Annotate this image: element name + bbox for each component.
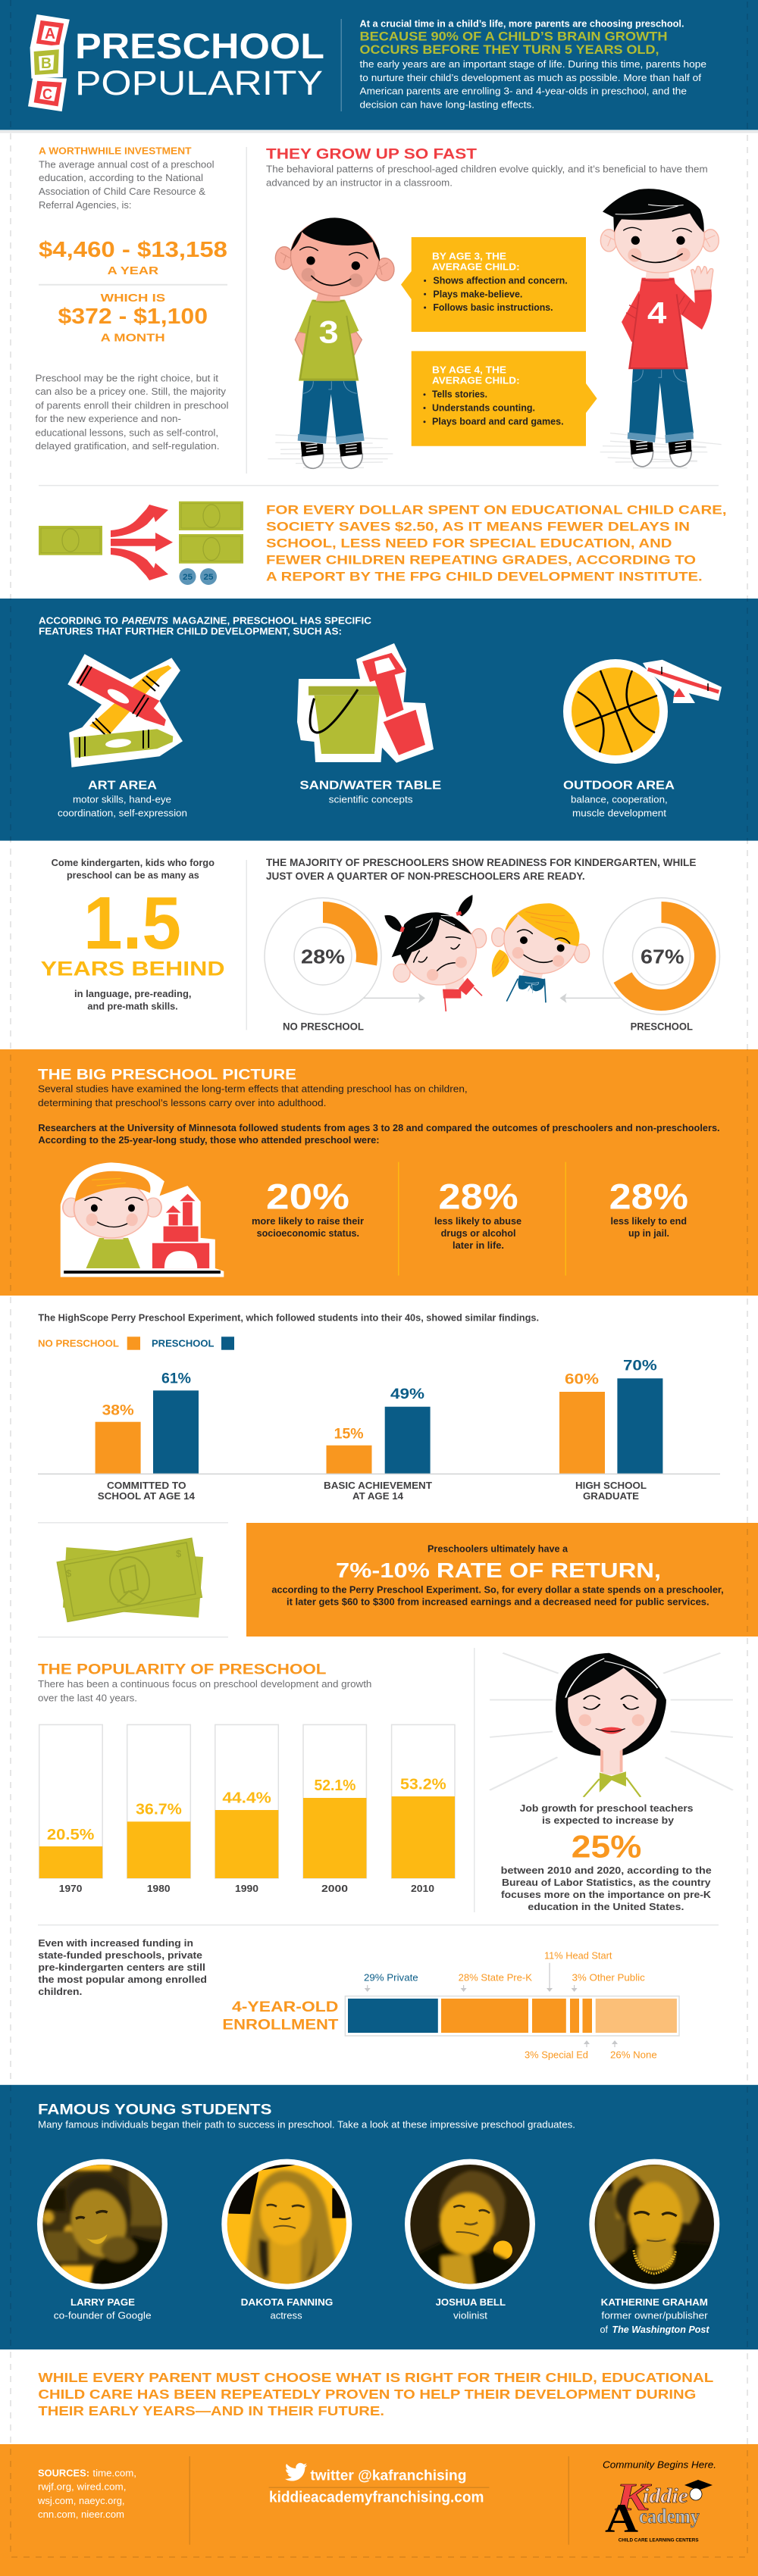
text block: intro: to nurture their child’s development as much as possible. More than half of [359, 72, 701, 83]
portrait: Dakota Fanning [221, 2159, 352, 2290]
text block: job growth stat: Job growth for preschool teachers [520, 1802, 693, 1814]
icon: ABC blocks [28, 14, 70, 111]
callout: by age 3: Shows affection and concern. [433, 274, 568, 286]
text block: features intro [39, 614, 372, 636]
text block: average cost: Referral Agencies, is: [39, 199, 132, 211]
contact links: twitter @kafranchising [310, 2468, 466, 2484]
heading: 4-year-old enrollment [222, 1999, 338, 2034]
donut chart: no preschool 28%: NO PRESCHOOL [283, 1021, 364, 1032]
legend: PRESCHOOL [152, 1338, 215, 1349]
text block: society saves: A REPORT BY THE FPG CHILD DEVELOPMENT INSTITUTE. [266, 569, 703, 583]
callout: by age 3: AVERAGE CHILD: [432, 261, 520, 273]
text block: closing statement [38, 2370, 714, 2418]
panel: return on childcare spending [39, 502, 726, 585]
title [75, 26, 324, 102]
text block: society saves [266, 503, 726, 583]
label: Larry Page [54, 2296, 152, 2321]
icon: money splitting into bills and coins: 25 [183, 573, 193, 582]
donut chart: preschool 67%: PRESCHOOL [631, 1021, 693, 1032]
label: Dakota Fanning: actress [270, 2310, 302, 2321]
bar chart: enrollment by year: 2010 [411, 1883, 434, 1894]
text block: average cost: The average annual cost of a preschool [39, 158, 215, 170]
bar chart: outcomes: COMMITTED TO [107, 1480, 186, 1491]
text block: society saves: SCHOOL, LESS NEED FOR SPECIAL EDUCATION, AND [266, 536, 672, 550]
illustration: happy girl [492, 903, 590, 1002]
panel: kindergarten readiness [265, 857, 720, 1032]
text block: funding: children. [38, 1986, 82, 1997]
label: Katherine Graham: former owner/publisher [601, 2310, 708, 2321]
text block: average cost [39, 158, 215, 211]
label: sand/water table: SAND/WATER TABLE [299, 780, 441, 792]
text block: pricey choice: can also be a pricey one. Still, the majority [35, 386, 227, 397]
callout: by age 3 [401, 237, 586, 332]
text block: closing statement: WHILE EVERY PARENT MUST CHOOSE WHAT IS RIGHT FOR THEIR CHILD, EDUCATIONAL [38, 2370, 714, 2385]
bar chart: outcomes: 60% [565, 1372, 599, 1388]
logo: Kiddie Academy: A [605, 2496, 638, 2541]
bar chart: enrollment by year: 1970 [59, 1883, 82, 1894]
label: art area [58, 780, 187, 818]
stat: 28% jail: less likely to end [611, 1215, 687, 1227]
portrait: Katherine Graham [589, 2159, 719, 2290]
logo: Kiddie Academy [603, 2459, 716, 2543]
text block: job growth stat: between 2010 and 2020, according to the [501, 1865, 712, 1876]
logo: Kiddie Academy: cademy [639, 2505, 700, 2528]
text block: experiment intro: The HighScope Perry Preschool Experiment, which followed students into their 40s, showed similar findings. [38, 1311, 539, 1323]
text block: intro [359, 18, 706, 111]
bar chart: outcomes: 70% [623, 1358, 657, 1374]
bar chart: enrollment by year: 52.1% [314, 1777, 356, 1794]
illustration: four-year-old boy: 4 [647, 297, 667, 330]
monthly cost figure: WHICH IS [101, 292, 165, 305]
text block: average cost: education, according to the National [39, 172, 203, 183]
monthly cost figure [58, 292, 208, 344]
logo: Kiddie Academy: K [615, 2476, 652, 2519]
text block: features intro: FEATURES THAT FURTHER CHILD DEVELOPMENT, SUCH AS: [39, 625, 342, 636]
panel: the big preschool picture [0, 1049, 758, 1296]
panel: they grow up so fast [266, 146, 722, 468]
text block: sources: wsj.com, naeyc.org, [37, 2495, 124, 2506]
panel: rate of return [38, 1522, 758, 1638]
bar chart: enrollment by year: 36.7% [136, 1802, 182, 1818]
text block: intro: decision can have long-lasting effects. [359, 99, 534, 111]
icon: banknotes: $ [66, 1568, 72, 1579]
monthly cost figure: A MONTH [101, 331, 165, 344]
text block: continuous focus: There has been a continuous focus on preschool development and growth [38, 1678, 371, 1690]
text block: features intro: MAGAZINE, PRESCHOOL HAS SPECIFIC [173, 614, 372, 626]
text block: funding: Even with increased funding in [38, 1937, 193, 1949]
portrait: Larry Page [37, 2159, 168, 2290]
heading: A WORTHWHILE INVESTMENT [39, 145, 192, 157]
portrait: Joshua Bell [405, 2159, 535, 2290]
text block: pricey choice: delayed gratification, and self-regulation. [35, 440, 220, 452]
icon: banknotes: $ [176, 1548, 182, 1559]
legend [38, 1336, 234, 1350]
label: outdoor area: OUTDOOR AREA [563, 780, 675, 792]
icon: banknotes [57, 1538, 203, 1622]
text block: long-term effects: According to the 25-year-long study, those who attended preschool were: [38, 1134, 380, 1146]
labels: enrollment categories with arrows: 11% Head Start [544, 1950, 612, 1962]
heading: THE POPULARITY OF PRESCHOOL [38, 1661, 327, 1677]
text block: sources: time.com, [92, 2468, 136, 2479]
panel: the popularity of preschool [38, 1661, 455, 1894]
text block: funding: the most popular among enrolled [38, 1974, 207, 1985]
big stat: 1.5 years behind: YEARS BEHIND [41, 958, 225, 980]
stat: 28% drugs: later in life. [453, 1240, 504, 1251]
illustration: sad girl and happy girl [384, 895, 590, 1011]
text block: intro: At a crucial time in a child’s life, more parents are choosing preschool. [359, 18, 684, 30]
label: Joshua Bell: JOSHUA BELL [436, 2296, 506, 2308]
text block: funding: pre-kindergarten centers are still [38, 1962, 205, 1973]
heading: THE MAJORITY OF PRESCHOOLERS SHOW READINESS FOR KINDERGARTEN, WHILE [266, 857, 696, 868]
bar chart: enrollment by year [39, 1724, 455, 1894]
heading [266, 857, 696, 882]
text block: behavior [266, 163, 708, 189]
bar chart: outcomes: AT AGE 14 [352, 1490, 404, 1502]
contact links [269, 2468, 489, 2506]
illustration: teacher [490, 1653, 733, 1797]
label: Katherine Graham [600, 2296, 709, 2335]
callout: by age 3: Follows basic instructions. [433, 302, 553, 313]
labels: enrollment categories with arrows: 28% State Pre-K [459, 1971, 532, 1983]
label: outdoor area: muscle development [572, 807, 666, 818]
text block: behavior: advanced by an instructor in a classroom. [266, 177, 453, 189]
title: PRESCHOOL [75, 26, 324, 66]
panel: years behind: in language, pre-reading, [74, 988, 191, 999]
text block: pricey choice: for the new experience and non- [35, 413, 181, 424]
bar chart: outcomes: BASIC ACHIEVEMENT [324, 1480, 432, 1491]
stat: 28% jail [609, 1177, 688, 1239]
donut chart: preschool 67% [603, 898, 720, 1032]
label: outdoor area: balance, cooperation, [571, 793, 668, 805]
text block: closing statement: THEIR EARLY YEARS—AND IN THEIR FUTURE. [38, 2403, 384, 2418]
callout: by age 3: Plays make-believe. [433, 288, 522, 299]
text block: job growth stat: Bureau of Labor Statistics, as the country [502, 1877, 711, 1888]
stat: 28% drugs: drugs or alcohol [441, 1227, 515, 1239]
label: art area: ART AREA [88, 780, 157, 792]
logo: Kiddie Academy: CHILD CARE LEARNING CENTERS [619, 2538, 699, 2543]
text block: long-term effects [38, 1083, 720, 1146]
label: art area: coordination, self-expression [58, 807, 187, 818]
panel: years behind [41, 857, 225, 1011]
icon: sand bucket and shovel [297, 643, 434, 763]
text block: pricey choice: Preschool may be the right choice, but it [35, 372, 218, 383]
illustration: sad girl [384, 895, 487, 1011]
heading: THE BIG PRESCHOOL PICTURE [38, 1067, 296, 1083]
label: sand/water table [299, 780, 441, 805]
contact links: kiddieacademyfranchising.com [269, 2490, 484, 2506]
label: Joshua Bell [436, 2296, 506, 2321]
text block: pricey choice: of parents enroll their children in preschool [35, 399, 229, 411]
text block: long-term effects: Researchers at the University of Minnesota followed students from ages 3 to 28 and compared the outcomes of preschoolers and non-preschoolers. [38, 1122, 720, 1133]
heading: THEY GROW UP SO FAST [266, 146, 477, 163]
bar chart: enrollment by year: 1980 [147, 1883, 170, 1894]
bar chart: outcomes: 15% [334, 1426, 364, 1442]
text block: intro: the early years are an important stage of life. During this time, parents hope [359, 58, 706, 70]
donut chart: preschool 67%: 67% [641, 945, 684, 968]
callout: 7%-10% rate of return: according to the Perry Preschool Experiment. So, for every dollar a state spends on a preschooler, [271, 1583, 724, 1595]
label: Larry Page: co-founder of Google [54, 2310, 152, 2321]
yearly cost figure: A YEAR [108, 264, 158, 277]
donut chart: no preschool 28%: 28% [301, 945, 345, 968]
text block: intro: BECAUSE 90% OF A CHILD’S BRAIN GROWTH [359, 30, 667, 43]
text block: job growth stat: education in the United States. [528, 1901, 684, 1912]
monthly cost figure: $372 - $1,100 [58, 305, 208, 329]
text block: long-term effects: Several studies have examined the long-term effects that attending preschool has on children, [38, 1083, 468, 1095]
stat: 20%: more likely to raise their [252, 1215, 364, 1227]
panel: years behind: preschool can be as many as [67, 870, 199, 881]
stat: 28% drugs: 28% [438, 1177, 518, 1217]
legend: NO PRESCHOOL [38, 1338, 119, 1349]
label: sand/water table: scientific concepts [329, 793, 413, 805]
stat: 28% jail: up in jail. [628, 1227, 669, 1239]
text block: intro: OCCURS BEFORE THEY TURN 5 YEARS OLD, [359, 43, 659, 57]
arrow: preschool to happy girl [559, 993, 622, 1003]
labels: enrollment categories with arrows: 3% Special Ed [525, 2049, 588, 2060]
icon: twitter bird [285, 2463, 307, 2481]
bar chart: enrollment by year: 53.2% [400, 1776, 446, 1793]
heading: 4-year-old enrollment: ENROLLMENT [222, 2017, 338, 2034]
icon: basketball and seesaw [563, 659, 722, 764]
text block: sources: cnn.com, nieer.com [38, 2509, 124, 2520]
bar chart: enrollment by year: 44.4% [222, 1790, 271, 1806]
callout: by age 4: AVERAGE CHILD: [432, 374, 520, 386]
stat: 28% jail: 28% [609, 1177, 688, 1217]
callout: by age 4: BY AGE 4, THE [432, 364, 506, 376]
icon: ABC blocks: C [42, 86, 52, 103]
big stat: 1.5 years behind [41, 881, 225, 980]
big stat: 1.5 years behind: 1.5 [83, 881, 181, 964]
arrow: no preschool to sad girl [364, 993, 425, 1003]
callout: by age 4: Tells stories. [432, 389, 487, 400]
text block: average cost: Association of Child Care Resource & [39, 186, 205, 197]
logo: Kiddie Academy: Community Begins Here. [603, 2459, 716, 2471]
text block: pricey choice [35, 372, 229, 452]
bar chart: outcomes: 61% [161, 1371, 191, 1386]
labels: enrollment categories with arrows: 26% None [610, 2049, 657, 2060]
text block: closing statement: CHILD CARE HAS BEEN REPEATEDLY PROVEN TO HELP THEIR DEVELOPMENT DURING [38, 2387, 696, 2402]
text block: job growth stat: 25% [572, 1828, 641, 1864]
text block: continuous focus [38, 1678, 371, 1703]
callout: by age 3: BY AGE 3, THE [432, 250, 506, 261]
icon: money splitting into bills and coins: 25 [203, 573, 214, 582]
label: outdoor area [563, 780, 675, 818]
bar chart: outcomes: 49% [390, 1386, 424, 1402]
panel: 4-year-old enrollment [38, 1937, 679, 2060]
callout: 7%-10% rate of return: Preschoolers ultimately have a [428, 1543, 568, 1554]
illustration: four-year-old boy [600, 189, 722, 468]
label: Joshua Bell: violinist [453, 2310, 487, 2321]
bar chart: outcomes [38, 1358, 720, 1502]
bar chart: enrollment by year: 2000 [321, 1883, 348, 1894]
labels: enrollment categories with arrows: 3% Other Public [572, 1971, 645, 1983]
text block: continuous focus: over the last 40 years. [38, 1692, 137, 1703]
stat: 20% [252, 1177, 364, 1239]
callout: 7%-10% rate of return [246, 1523, 758, 1637]
yearly cost figure: $4,460 - $13,158 [39, 238, 227, 262]
panel: years behind: and pre-math skills. [87, 1000, 178, 1011]
label: Katherine Graham: KATHERINE GRAHAM [601, 2296, 708, 2308]
callout: by age 4 [412, 351, 597, 446]
label: Katherine Graham: The Washington Post [612, 2324, 709, 2335]
label: Larry Page: LARRY PAGE [70, 2296, 135, 2308]
stacked bar: enrollment shares [345, 1996, 679, 2036]
label: Dakota Fanning: DAKOTA FANNING [241, 2296, 333, 2308]
illustration: three-year-old boy [268, 214, 394, 468]
icon: money splitting into bills and coins [39, 502, 243, 585]
text block: society saves: FEWER CHILDREN REPEATING GRADES, ACCORDING TO [266, 552, 696, 567]
text block: sources: SOURCES: [38, 2468, 89, 2479]
text block: funding [38, 1937, 207, 1997]
bar chart: outcomes: HIGH SCHOOL [575, 1480, 647, 1491]
panel: footer [0, 2444, 758, 2576]
yearly cost figure [39, 238, 227, 277]
bar chart: enrollment by year: 1990 [235, 1883, 258, 1894]
logo: Kiddie Academy: iddie [643, 2484, 688, 2507]
panel: years behind: Come kindergarten, kids who forgo [52, 857, 215, 868]
text block: features intro: ACCORDING TO [39, 614, 118, 626]
panel: famous young students [0, 2085, 758, 2349]
text block: job growth stat: is expected to increase by [542, 1815, 675, 1826]
label: Katherine Graham: of [600, 2324, 608, 2335]
callout: by age 4: Understands counting. [432, 402, 535, 414]
panel: job growth [490, 1653, 733, 1912]
icon: ABC blocks: B [41, 55, 52, 72]
bar chart: outcomes: GRADUATE [583, 1490, 639, 1502]
panel: highscope perry experiment [38, 1311, 720, 1502]
title: POPULARITY [75, 64, 323, 102]
heading: FAMOUS YOUNG STUDENTS [38, 2102, 271, 2118]
panel: preschool features [0, 599, 758, 841]
heading: 4-year-old enrollment: 4-YEAR-OLD [232, 1999, 338, 2015]
label: art area: motor skills, hand-eye [73, 793, 171, 805]
text block: sources: rwjf.org, wired.com, [38, 2481, 126, 2493]
callout: by age 4: Plays board and card games. [432, 416, 564, 427]
labels: enrollment categories with arrows [364, 1950, 657, 2060]
bar chart: enrollment by year: 20.5% [47, 1827, 95, 1843]
text block: job growth stat [501, 1802, 712, 1912]
stat: 28% drugs: less likely to abuse [434, 1215, 522, 1227]
stat: 28% drugs [434, 1177, 522, 1251]
donut chart: no preschool 28% [265, 898, 381, 1032]
text block: features intro: PARENTS [122, 614, 168, 626]
text block: sources [37, 2468, 136, 2520]
text block: job growth stat: focuses more on the importance on pre-K [501, 1889, 712, 1900]
icon: ABC blocks: A [45, 26, 55, 42]
labels: enrollment categories with arrows: 29% Private [364, 1971, 418, 1983]
stat: 20%: 20% [266, 1177, 349, 1217]
text block: intro: American parents are enrolling 3- and 4-year-olds in preschool, and the [359, 86, 687, 97]
text block: famous intro: Many famous individuals began their path to success in preschool. Take a look at these impressive preschool graduates. [38, 2119, 575, 2131]
illustration: boy with castle blocks [61, 1162, 224, 1277]
panel: header [0, 0, 758, 133]
text block: funding: state-funded preschools, private [38, 1949, 202, 1961]
heading: JUST OVER A QUARTER OF NON-PRESCHOOLERS ARE READY. [266, 871, 585, 882]
stat: 20%: socioeconomic status. [257, 1227, 359, 1239]
text block: long-term effects: determining that preschool’s lessons carry over into adulthood. [38, 1097, 327, 1108]
text block: society saves: SOCIETY SAVES $2.50, AS IT MEANS FEWER DELAYS IN [266, 519, 690, 533]
bar chart: outcomes: 38% [102, 1402, 134, 1418]
illustration: three-year-old boy: 3 [319, 314, 339, 350]
text block: pricey choice: educational lessons, such as self-control, [35, 427, 218, 438]
icon: crayons [67, 654, 183, 767]
callout: 7%-10% rate of return: 7%-10% RATE OF RETURN, [336, 1558, 661, 1582]
bar chart: outcomes: SCHOOL AT AGE 14 [98, 1490, 196, 1502]
text block: behavior: The behavioral patterns of preschool-aged children evolve quickly, and it’s beneficial to have them [266, 163, 708, 174]
panel: a worthwhile investment [35, 145, 229, 452]
text block: society saves: FOR EVERY DOLLAR SPENT ON EDUCATIONAL CHILD CARE, [266, 503, 726, 517]
label: Dakota Fanning [241, 2296, 333, 2321]
callout: 7%-10% rate of return: it later gets $60 to $300 from increased earnings and a decreased need for public services. [287, 1596, 709, 1607]
